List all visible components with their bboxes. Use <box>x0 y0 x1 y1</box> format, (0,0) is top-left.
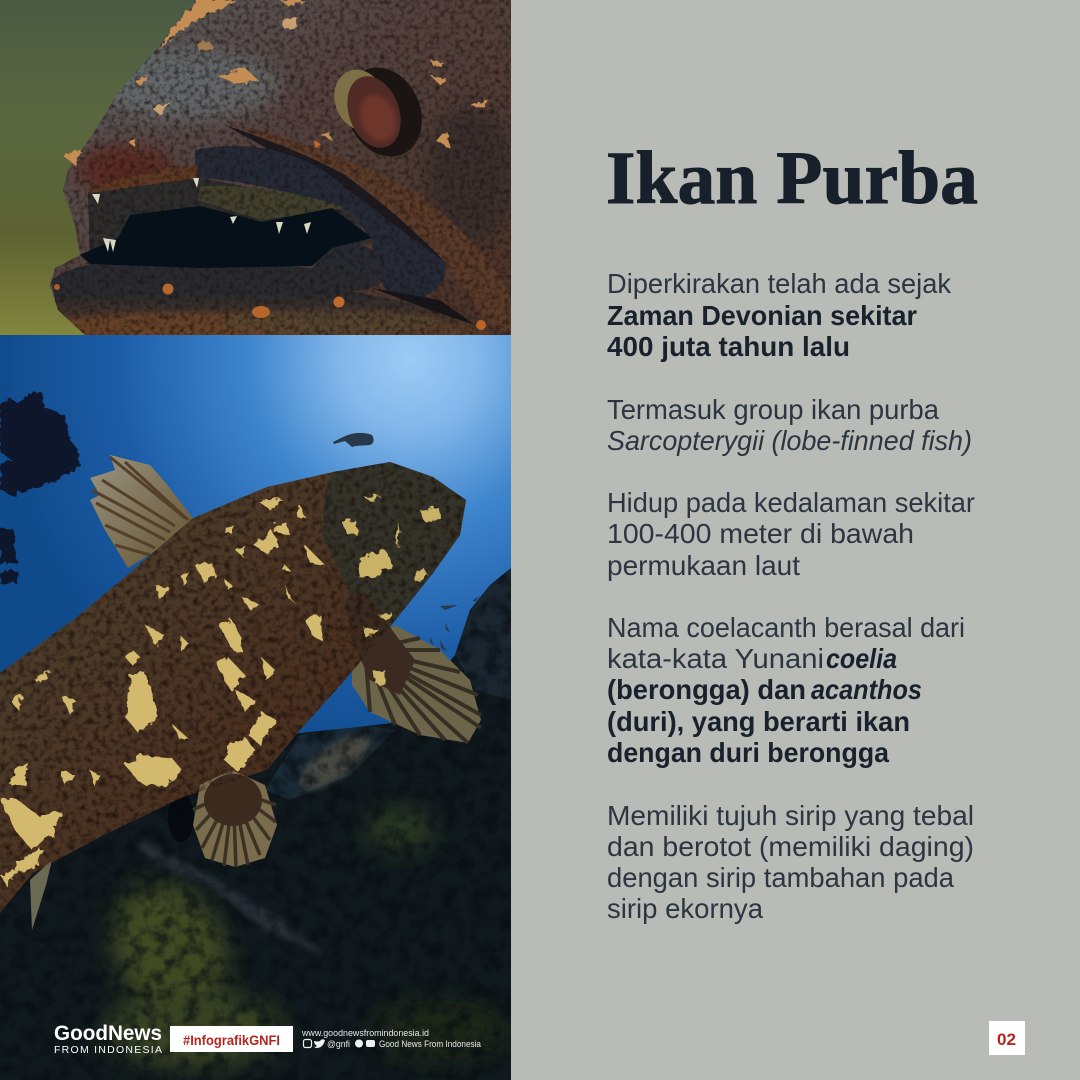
upper jaw <box>88 178 370 270</box>
icon: fish eye <box>326 55 436 169</box>
divers silhouettes <box>0 392 80 584</box>
fact: fins <box>607 800 974 924</box>
pectoral fin (back) <box>352 625 481 743</box>
hashtag badge: #InfografikGNFI <box>183 1032 280 1048</box>
fact: depth <box>607 487 975 581</box>
fact: fins: dan berotot (memiliki daging) <box>607 831 974 862</box>
open mouth <box>80 206 372 268</box>
fact: name origin: (duri), yang berarti ikan <box>607 706 910 737</box>
head silhouette <box>50 0 511 335</box>
fact: name origin <box>607 612 965 768</box>
footer branding <box>54 1022 481 1056</box>
fact: age: Diperkirakan telah ada sejak <box>607 268 952 299</box>
photo: coelacanth swimming with divers <box>0 335 511 1080</box>
title: Ikan Purba <box>606 137 978 220</box>
fact: depth: Hidup pada kedalaman sekitar <box>607 487 975 518</box>
brown cheek band <box>225 122 511 335</box>
fact: name origin: (berongga) dan <box>607 674 806 705</box>
dorsal fin <box>90 455 193 568</box>
body texture <box>0 460 470 920</box>
fact: depth: permukaan laut <box>607 550 800 581</box>
social icons and handles <box>304 1039 481 1049</box>
fish teeth <box>92 178 311 252</box>
pelvic fin <box>193 770 277 867</box>
fact: age: Zaman Devonian sekitar <box>607 300 917 331</box>
fact: name origin: acanthos <box>811 674 922 705</box>
photo: coelacanth head close-up <box>0 0 511 335</box>
fact: name origin: kata-kata Yunani <box>607 643 824 674</box>
skin texture <box>0 0 511 335</box>
seabed and rocks <box>0 560 511 1080</box>
logo: GoodNews From Indonesia: FROM INDONESIA <box>54 1044 162 1056</box>
logo: GoodNews From Indonesia: GoodNews <box>54 1022 162 1045</box>
fact: fins: dengan sirip tambahan pada <box>607 862 954 893</box>
fact: group: Sarcopterygii (lobe-finned fish) <box>607 425 972 456</box>
fact: name origin: Nama coelacanth berasal dari <box>607 612 965 643</box>
blue water background <box>0 335 511 734</box>
fact: name origin: coelia <box>826 643 897 674</box>
orange crust patches <box>62 0 490 165</box>
fact: depth: 100-400 meter di bawah <box>607 518 914 549</box>
head spots <box>342 495 442 686</box>
text panel content <box>606 137 1025 1055</box>
green water background <box>0 0 511 335</box>
fact: fins: sirip ekornya <box>607 893 763 924</box>
page number <box>989 1021 1025 1055</box>
fact: fins: Memiliki tujuh sirip yang tebal <box>607 800 974 831</box>
fact: group <box>607 394 972 456</box>
logo: GoodNews From Indonesia <box>54 1022 162 1056</box>
upper lip <box>195 146 446 302</box>
social icons and handles: Good News From Indonesia <box>379 1039 481 1049</box>
small lower fin <box>30 860 52 930</box>
hashtag badge <box>170 1026 293 1052</box>
fact: age: 400 juta tahun lalu <box>607 331 850 362</box>
small fish <box>333 433 480 652</box>
page number: 02 <box>997 1030 1016 1049</box>
lower jaw <box>52 244 490 335</box>
fact: name origin: dengan duri berongga <box>607 737 889 768</box>
social icons and handles: @gnfi <box>327 1039 350 1049</box>
cream body spots <box>0 499 325 888</box>
fish body <box>0 462 466 913</box>
website url: www.goodnewsfromindonesia.id <box>301 1028 429 1038</box>
fact: age <box>607 268 952 362</box>
orange lumps on jaw <box>54 284 486 330</box>
fact: group: Termasuk group ikan purba <box>607 394 939 425</box>
